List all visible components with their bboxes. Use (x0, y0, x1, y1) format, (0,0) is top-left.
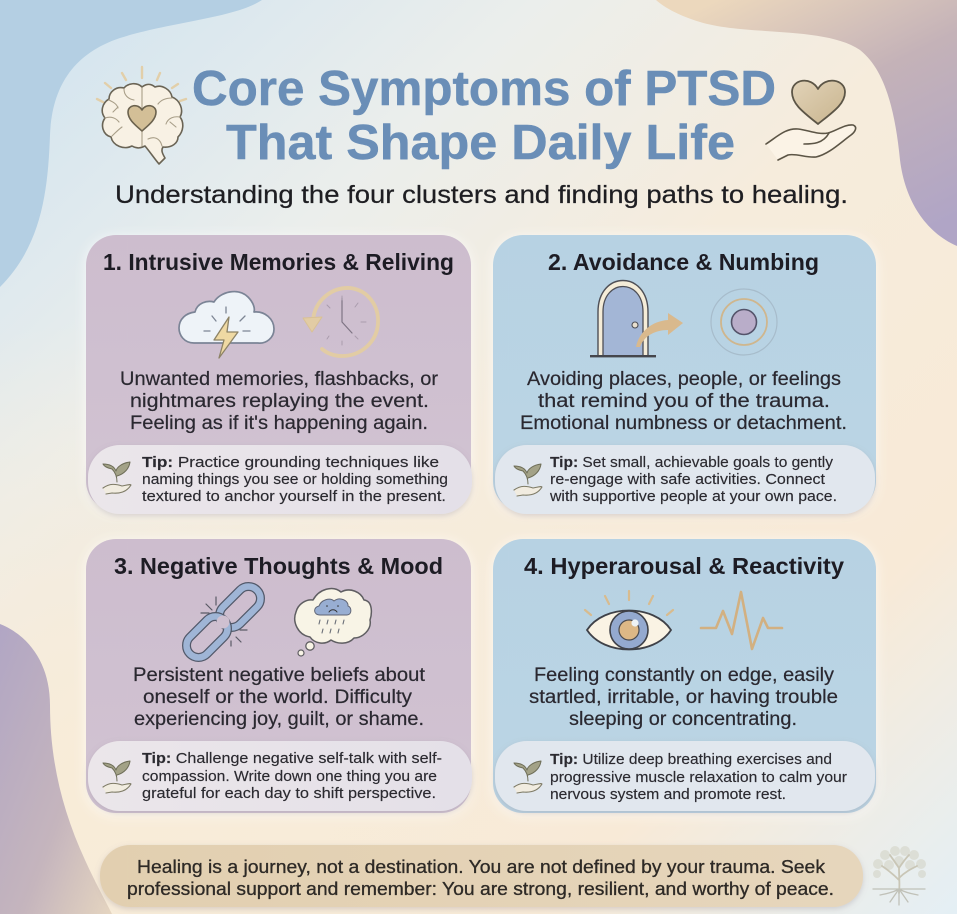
title (192, 62, 776, 170)
icon: tree of life (873, 846, 926, 905)
callout: tip 1 (88, 445, 472, 514)
text block: card 4 (529, 665, 838, 730)
text block: tip 2: re-engage with safe activities. Connect (550, 472, 825, 488)
text block: card 4: startled, irritable, or having trouble (529, 687, 838, 708)
text block: tip 2: with supportive people at your own pace. (549, 489, 837, 505)
icon: sprout in hand (514, 464, 542, 496)
panel: 2 avoidance (493, 235, 876, 514)
text block: tip 2: Tip: Set small, achievable goals to gently (550, 455, 834, 471)
text block: card 3 (133, 665, 426, 730)
text block: card 3: oneself or the world. Difficulty (143, 687, 413, 708)
text block: tip 3: Tip: Challenge negative self-talk with self- (142, 751, 442, 767)
subtitle: Understanding the four clusters and finding paths to healing. (115, 181, 848, 209)
icon: thought bubble with sad cloud (295, 589, 371, 656)
icon: sprout in hand (103, 761, 131, 793)
callout: closing message (100, 845, 863, 907)
icon: sprout in hand (514, 761, 542, 793)
text block: card 1: nightmares replaying the event. (130, 391, 429, 412)
text block: card 1 (120, 369, 439, 434)
icon: heart over hand (766, 81, 856, 160)
text block: card 3: experiencing joy, guilt, or shame. (134, 709, 424, 730)
callout: tip 2 (495, 445, 875, 514)
text block: tip 4 (550, 752, 847, 803)
corner blob: top left blue (0, 0, 262, 287)
title: That Shape Daily Life (226, 116, 735, 170)
text block: card 4: sleeping or concentrating. (569, 709, 797, 730)
text block: card 2 (520, 369, 847, 434)
icon: eye (585, 591, 673, 650)
text block: card 1: Unwanted memories, flashbacks, or (120, 369, 439, 390)
corner blob: bottom left purple (0, 624, 112, 914)
text block: tip 1: Tip: Practice grounding techniques like (142, 455, 439, 471)
text block: card 3: Persistent negative beliefs about (133, 665, 426, 686)
text block: tip 4: nervous system and promote rest. (550, 787, 786, 803)
title: Core Symptoms of PTSD (192, 62, 776, 116)
icon: clock with rewind arrow (303, 288, 378, 356)
text block: tip 4: Tip: Utilize deep breathing exercises and (550, 752, 832, 768)
callout: tip 3 (88, 741, 472, 811)
text block: card 2: Emotional numbness or detachment. (520, 413, 847, 434)
heading: card 4: 4. Hyperarousal & Reactivity (524, 553, 844, 579)
icon: storm cloud (179, 292, 274, 358)
callout: closing message: professional support and remember: You are strong, resilient, and worthy of peace. (127, 879, 834, 899)
text block: card 2: that remind you of the trauma. (538, 391, 830, 412)
icon: concentric circles (711, 289, 777, 355)
text block: tip 4: progressive muscle relaxation to calm your (550, 770, 847, 786)
text block: card 4: Feeling constantly on edge, easily (534, 665, 835, 686)
icon: brain with heart (97, 67, 186, 164)
icon: pulse line (701, 592, 782, 649)
icon: sprout in hand (103, 462, 131, 494)
panel: 1 intrusive memories (86, 235, 472, 514)
callout: closing message: Healing is a journey, not a destination. You are not defined by your trauma. Seek (137, 857, 826, 877)
text block: tip 1 (142, 455, 448, 505)
text block: tip 1: textured to anchor yourself in the present. (142, 489, 446, 505)
panel: 3 negative thoughts (86, 539, 472, 813)
text block: tip 1: naming things you see or holding something (142, 472, 448, 488)
icon: door with arrow (590, 280, 683, 357)
icon: broken chain (182, 582, 265, 662)
heading: card 3: 3. Negative Thoughts & Mood (114, 553, 443, 579)
callout: tip 4 (495, 741, 875, 811)
panel: 4 hyperarousal (493, 539, 876, 813)
corner blob: top right mauve (656, 0, 957, 246)
text block: card 1: Feeling as if it's happening again. (130, 413, 428, 434)
text block: tip 2 (549, 455, 837, 505)
text block: tip 3: grateful for each day to shift perspective. (142, 786, 436, 802)
text block: card 2: Avoiding places, people, or feelings (527, 369, 841, 390)
text block: tip 3: compassion. Write down one thing you are (142, 769, 437, 785)
text block: tip 3 (142, 751, 442, 802)
heading: card 2: 2. Avoidance & Numbing (548, 249, 819, 275)
heading: card 1: 1. Intrusive Memories & Reliving (103, 249, 454, 275)
